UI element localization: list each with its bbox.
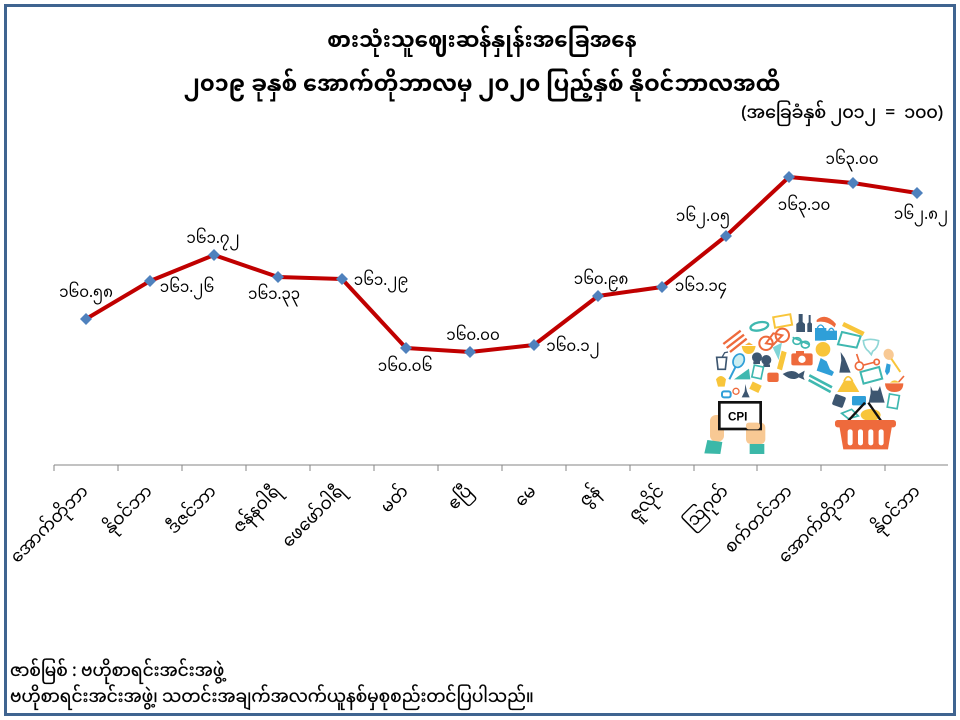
data labels: ၁၆၃.၁၀ (778, 190, 830, 223)
month labels: ဒီဇင်ဘာ (158, 476, 228, 545)
line chart (1, 144, 948, 574)
laptop (838, 332, 861, 348)
yellow bar (842, 322, 865, 336)
fish (783, 371, 805, 380)
month labels: စက်တင်ဘာ (715, 476, 804, 565)
base year note: (အခြေခံနှစ် ၂၀၁၂ = ၁၀၀) (741, 95, 943, 133)
data labels: ၁၆၁.၁၄ (675, 271, 727, 304)
monitor (860, 367, 882, 384)
month labels: ဧပြီ (438, 476, 484, 521)
skates (817, 358, 834, 376)
icon: hands holding CPI tablet: CPI (728, 410, 747, 423)
bowl (742, 346, 756, 354)
blue camera (852, 396, 866, 405)
goods in basket (842, 409, 858, 419)
month labels: ဖေဖော်ဝါရီ (273, 475, 357, 559)
bowl orange (885, 383, 903, 392)
shoe (722, 391, 731, 397)
month labels: မေ (505, 476, 548, 518)
tablet small (752, 365, 763, 379)
month labels: အောက်တိုဘာ (769, 476, 868, 574)
dress (839, 352, 851, 373)
glasses (793, 337, 809, 348)
yellow bread (816, 342, 830, 357)
navy camera (832, 394, 846, 408)
tank top (869, 386, 885, 403)
icon: scattered goods (716, 314, 904, 421)
source note (10, 653, 534, 717)
boxing gloves (752, 352, 762, 362)
month labels: နိုဝင်ဘာ (862, 476, 932, 545)
data labels: ၁၆၁.၇၂ (186, 223, 240, 256)
month labels: အောက်တိုဘာ (1, 476, 100, 574)
guitar (742, 384, 750, 397)
croissant (817, 317, 836, 327)
spoon (882, 347, 896, 362)
source note: ဗဟိုစာရင်းအင်းအဖွဲ့၊ သတင်းအချက်အလက်ယူနစ်မှစုစည်းတင်ပြပါသည်။ (10, 679, 534, 717)
bacon (723, 331, 747, 352)
muffin (716, 376, 726, 387)
cat shirt (863, 339, 879, 355)
month labels: ဩဂုတ် (675, 476, 740, 541)
title: စားသုံးသူဈေးဆန်နှုန်းအခြေအနေ (327, 20, 637, 66)
month labels (1, 475, 932, 574)
data labels: ၁၆၁.၂၆ (160, 272, 214, 305)
handbag (837, 381, 859, 392)
bike (759, 329, 789, 350)
icon: orange basket (835, 403, 896, 449)
ring (733, 388, 739, 394)
subtitle: ၂၀၁၉ ခုနှစ် အောက်တိုဘာလမှ ၂၀၂၀ ပြည့်နှစ် နိုဝင်ဘာလအထိ (184, 62, 780, 111)
icon: hands holding CPI tablet (704, 402, 765, 454)
month labels: ဇူလိုင် (619, 476, 676, 532)
teal sticks (809, 375, 832, 392)
data markers (80, 171, 923, 358)
lipstick (777, 351, 787, 370)
pen (885, 363, 891, 375)
data labels: ၁၆၀.၉၈ (574, 264, 628, 297)
data labels: ၁၆၃.၀၀ (826, 144, 878, 177)
data labels: ၁၆၀.၀၆ (378, 351, 432, 384)
collar (750, 321, 769, 332)
data labels (59, 144, 948, 384)
month labels: မတ် (371, 476, 420, 524)
data labels: ၁၆၀.၅၈ (59, 277, 113, 310)
heel (734, 369, 750, 379)
racket (731, 352, 746, 369)
data labels: ၁၆၀.၁၂ (546, 331, 600, 364)
ice cream (773, 343, 782, 360)
data line (86, 177, 917, 352)
illustration: CPI shopping basket (704, 314, 904, 454)
bags (815, 328, 826, 341)
data labels: ၁၆၁.၃၃ (248, 279, 300, 312)
month labels: နိုဝင်ဘာ (94, 476, 164, 545)
data labels: ၁၆၀.၀၀ (446, 320, 500, 353)
month labels: ဇွန် (570, 476, 612, 518)
yellow monitor (773, 314, 792, 328)
data labels: ၁၆၂.၈၂ (894, 199, 948, 232)
yellow box (749, 382, 762, 393)
orange bag (767, 373, 779, 382)
scooter (855, 354, 879, 370)
drink (717, 357, 727, 369)
camera (791, 353, 813, 365)
source note: ဇာစ်မြစ် : ဗဟိုစာရင်းအင်းအဖွဲ့ (10, 653, 227, 691)
x axis (54, 465, 948, 471)
phone (887, 394, 899, 409)
data labels: ၁၆၂.၀၅ (676, 201, 730, 234)
month labels: ဇန်နဝါရီ (223, 475, 293, 544)
nail polish (796, 314, 805, 332)
data labels: ၁၆၁.၂၉ (354, 265, 408, 298)
